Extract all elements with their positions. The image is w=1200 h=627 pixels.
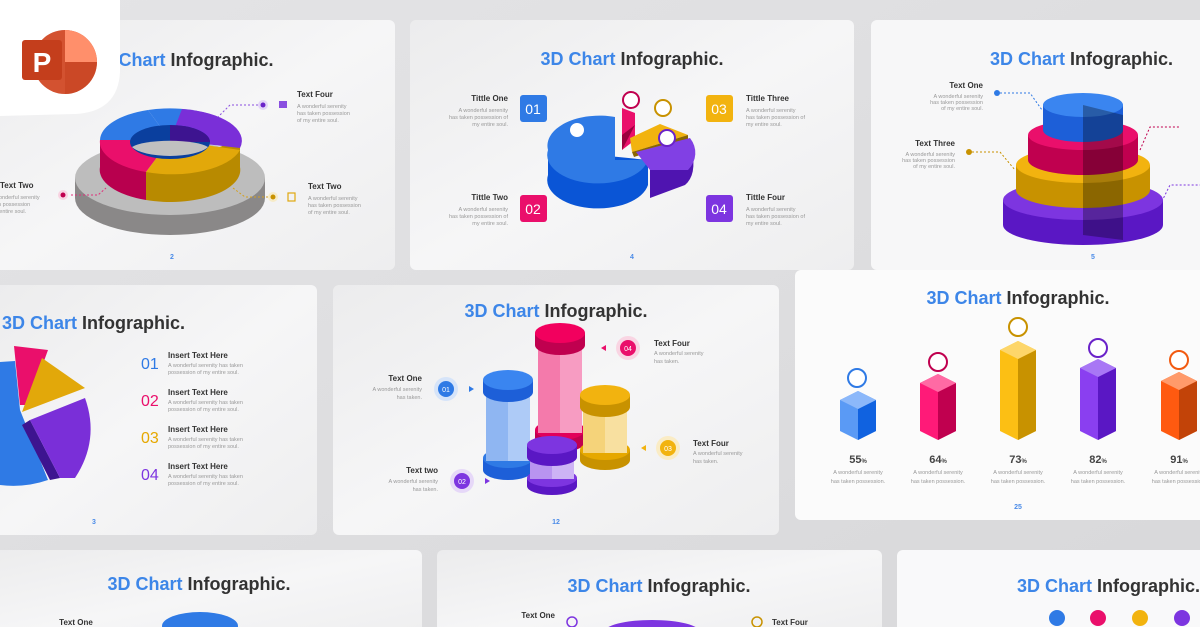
label: Text Four: of my entire soul. bbox=[297, 118, 339, 124]
box 01: 01 bbox=[525, 101, 541, 117]
box 01 bbox=[449, 94, 547, 128]
icon circles bbox=[1049, 610, 1190, 626]
list item 01: 01 bbox=[141, 356, 159, 373]
box 03: has taken possession of bbox=[746, 115, 805, 121]
percent labels: 64% bbox=[929, 454, 947, 466]
list item 01: possession of my entire soul. bbox=[168, 370, 239, 376]
label: Text Two left bbox=[0, 181, 68, 215]
label 02: 02 bbox=[458, 479, 466, 486]
box 01: Tittle One bbox=[471, 94, 509, 103]
card: cylinder columns slide: 12 bbox=[552, 519, 560, 526]
label 03: A wonderful serenity bbox=[693, 451, 743, 457]
card: pie chart slide with boxes: 4 bbox=[630, 254, 634, 261]
list item 03 bbox=[141, 425, 243, 450]
title: 3D Chart Infographic. bbox=[990, 49, 1173, 69]
label: Text Four: A wonderful serenity bbox=[297, 104, 347, 110]
purple bbox=[527, 477, 577, 495]
label: Text Two right bbox=[268, 182, 361, 216]
box 02: my entire soul. bbox=[472, 221, 508, 227]
list item 02: A wonderful serenity has taken bbox=[168, 400, 243, 406]
descriptions: has taken possession. bbox=[1071, 479, 1126, 485]
box 04: my entire soul. bbox=[746, 221, 782, 227]
labels: of my entire soul. bbox=[941, 106, 983, 112]
card: stacked cylinder slide bbox=[871, 20, 1200, 270]
label 02: Text two bbox=[406, 466, 438, 475]
card: pie chart slide with boxes bbox=[410, 20, 854, 270]
box 03: 03 bbox=[711, 101, 727, 117]
title: 3D Chart Infographic. bbox=[107, 574, 291, 594]
percent labels: 55% bbox=[849, 454, 867, 466]
percent labels: 82% bbox=[1089, 454, 1107, 466]
list item 02 bbox=[141, 388, 243, 413]
descriptions: A wonderful serenity bbox=[993, 470, 1043, 476]
card: cylinder columns slide bbox=[333, 285, 779, 535]
label: Text Two right: of my entire soul. bbox=[308, 210, 350, 216]
label: Text Four bbox=[258, 90, 350, 124]
card: bottom left slide: Text One bbox=[59, 618, 93, 627]
card: stacked cylinder slide: Text Three bbox=[915, 139, 956, 148]
descriptions: A wonderful serenity bbox=[1073, 470, 1123, 476]
label 03: 03 bbox=[664, 446, 672, 453]
list item 01 bbox=[141, 351, 243, 376]
descriptions: A wonderful serenity bbox=[913, 470, 963, 476]
percent labels bbox=[849, 454, 1188, 466]
box 02: 02 bbox=[525, 201, 541, 217]
donut chart bbox=[75, 108, 265, 235]
list item 02: Insert Text Here bbox=[168, 388, 228, 397]
card: stacked cylinder slide: has taken possession bbox=[902, 158, 955, 164]
labels bbox=[930, 81, 1042, 112]
pin icons bbox=[848, 318, 1188, 387]
box 03 bbox=[706, 94, 805, 128]
label: Text Two right: has taken possession bbox=[308, 203, 361, 209]
box 01: has taken possession of bbox=[449, 115, 508, 121]
list item 01: Insert Text Here bbox=[168, 351, 228, 360]
cylinders bbox=[483, 323, 630, 495]
title: 3D Chart Infographic. bbox=[90, 50, 274, 70]
label 02: has taken. bbox=[413, 487, 438, 493]
label: Text Two right: Text Two bbox=[308, 182, 342, 191]
title: 3D Chart Infographic. bbox=[1017, 576, 1200, 596]
card: donut chart slide bbox=[0, 20, 395, 270]
label 04 bbox=[601, 336, 704, 365]
labels: A wonderful serenity bbox=[933, 94, 983, 100]
box 01: A wonderful serenity bbox=[458, 108, 508, 114]
percent labels: 73% bbox=[1009, 454, 1027, 466]
page number: 2 bbox=[170, 254, 174, 261]
blue ellipse chart top bbox=[162, 612, 238, 627]
list item 02: 02 bbox=[141, 393, 159, 410]
label 04: has taken. bbox=[654, 359, 680, 365]
card: bottom middle slide bbox=[437, 550, 882, 627]
title: 3D Chart Infographic. bbox=[464, 301, 648, 321]
list item 03: possession of my entire soul. bbox=[168, 444, 239, 450]
list item 01: A wonderful serenity has taken bbox=[168, 363, 243, 369]
label 04: 04 bbox=[624, 346, 632, 353]
percent labels: 91% bbox=[1170, 454, 1188, 466]
title: 3D Chart Infographic. bbox=[567, 576, 751, 596]
box 04: Tittle Four bbox=[746, 193, 785, 202]
label 01: A wonderful serenity bbox=[372, 387, 422, 393]
box 02: has taken possession of bbox=[449, 214, 508, 220]
card: pie chart list slide: 3 bbox=[92, 519, 96, 526]
title: 3D Chart Infographic. bbox=[540, 49, 724, 69]
card: bottom left slide bbox=[0, 550, 422, 627]
label: Text Four: Text Four bbox=[297, 90, 333, 99]
label: Text Two left: Text Two bbox=[0, 181, 34, 190]
list item 04: 04 bbox=[141, 467, 159, 484]
logo: PowerPoint bbox=[0, 0, 120, 116]
list item 03: A wonderful serenity has taken bbox=[168, 437, 243, 443]
label 01: has taken. bbox=[397, 395, 422, 401]
list item 02: possession of my entire soul. bbox=[168, 407, 239, 413]
card: pie chart list slide bbox=[0, 285, 317, 535]
label 03: Text Four bbox=[693, 439, 729, 448]
card: stacked cylinder slide: A wonderful serenity bbox=[905, 152, 955, 158]
card: bottom middle slide: Text Four bbox=[772, 618, 808, 627]
stacked cylinders bbox=[1003, 93, 1163, 245]
box 03: Tittle Three bbox=[746, 94, 790, 103]
box 03: A wonderful serenity bbox=[746, 108, 796, 114]
list item 04: possession of my entire soul. bbox=[168, 481, 239, 487]
label 03 bbox=[641, 436, 743, 465]
card: 3D bar chart slide bbox=[795, 270, 1200, 520]
label 04: A wonderful serenity bbox=[654, 351, 704, 357]
label 01: Text One bbox=[388, 374, 423, 383]
label 02 bbox=[388, 466, 490, 493]
card: bottom right slide bbox=[897, 550, 1200, 627]
card: bottom middle slide: Text One bbox=[521, 611, 556, 620]
card: 3D bar chart slide: 25 bbox=[1014, 504, 1022, 511]
card: stacked cylinder slide: of my entire soul. bbox=[913, 164, 955, 170]
label 04: Text Four bbox=[654, 339, 690, 348]
box 02: Tittle Two bbox=[471, 193, 508, 202]
descriptions: has taken possession. bbox=[991, 479, 1046, 485]
box 02: A wonderful serenity bbox=[458, 207, 508, 213]
descriptions: A wonderful serenity bbox=[833, 470, 883, 476]
label: Text Four: has taken possession bbox=[297, 111, 350, 117]
pink bbox=[535, 432, 585, 452]
box 01: my entire soul. bbox=[472, 122, 508, 128]
label 02: A wonderful serenity bbox=[388, 479, 438, 485]
blue bbox=[483, 460, 533, 480]
box 03: my entire soul. bbox=[746, 122, 782, 128]
list item 04 bbox=[141, 462, 243, 487]
box 04: has taken possession of bbox=[746, 214, 805, 220]
label: Text Two right: A wonderful serenity bbox=[308, 196, 358, 202]
box 02 bbox=[449, 193, 547, 227]
card: stacked cylinder slide: 5 bbox=[1091, 254, 1095, 261]
list item 04: Insert Text Here bbox=[168, 462, 228, 471]
title: 3D Chart Infographic. bbox=[926, 288, 1110, 308]
purple ellipse bbox=[604, 620, 700, 627]
labels: has taken possession bbox=[930, 100, 983, 106]
descriptions: has taken possession. bbox=[831, 479, 886, 485]
label 01 bbox=[372, 374, 474, 401]
descriptions: has taken possession. bbox=[911, 479, 966, 485]
descriptions bbox=[831, 470, 1200, 485]
list item 04: A wonderful serenity has taken bbox=[168, 474, 243, 480]
label 03: has taken. bbox=[693, 459, 719, 465]
label 01: 01 bbox=[442, 387, 450, 394]
logo: PowerPoint: P bbox=[33, 47, 51, 78]
title: 3D Chart Infographic. bbox=[2, 313, 185, 333]
box 04: 04 bbox=[711, 201, 727, 217]
box 04: A wonderful serenity bbox=[746, 207, 796, 213]
pie chart bbox=[547, 108, 695, 208]
list item 03: Insert Text Here bbox=[168, 425, 228, 434]
box 04 bbox=[706, 193, 805, 227]
icons on pie bbox=[569, 92, 675, 146]
yellow bbox=[580, 450, 630, 470]
labels: Text One bbox=[949, 81, 984, 90]
pie chart partial bbox=[0, 346, 91, 486]
list item 03: 03 bbox=[141, 430, 159, 447]
bars bbox=[840, 341, 1197, 440]
